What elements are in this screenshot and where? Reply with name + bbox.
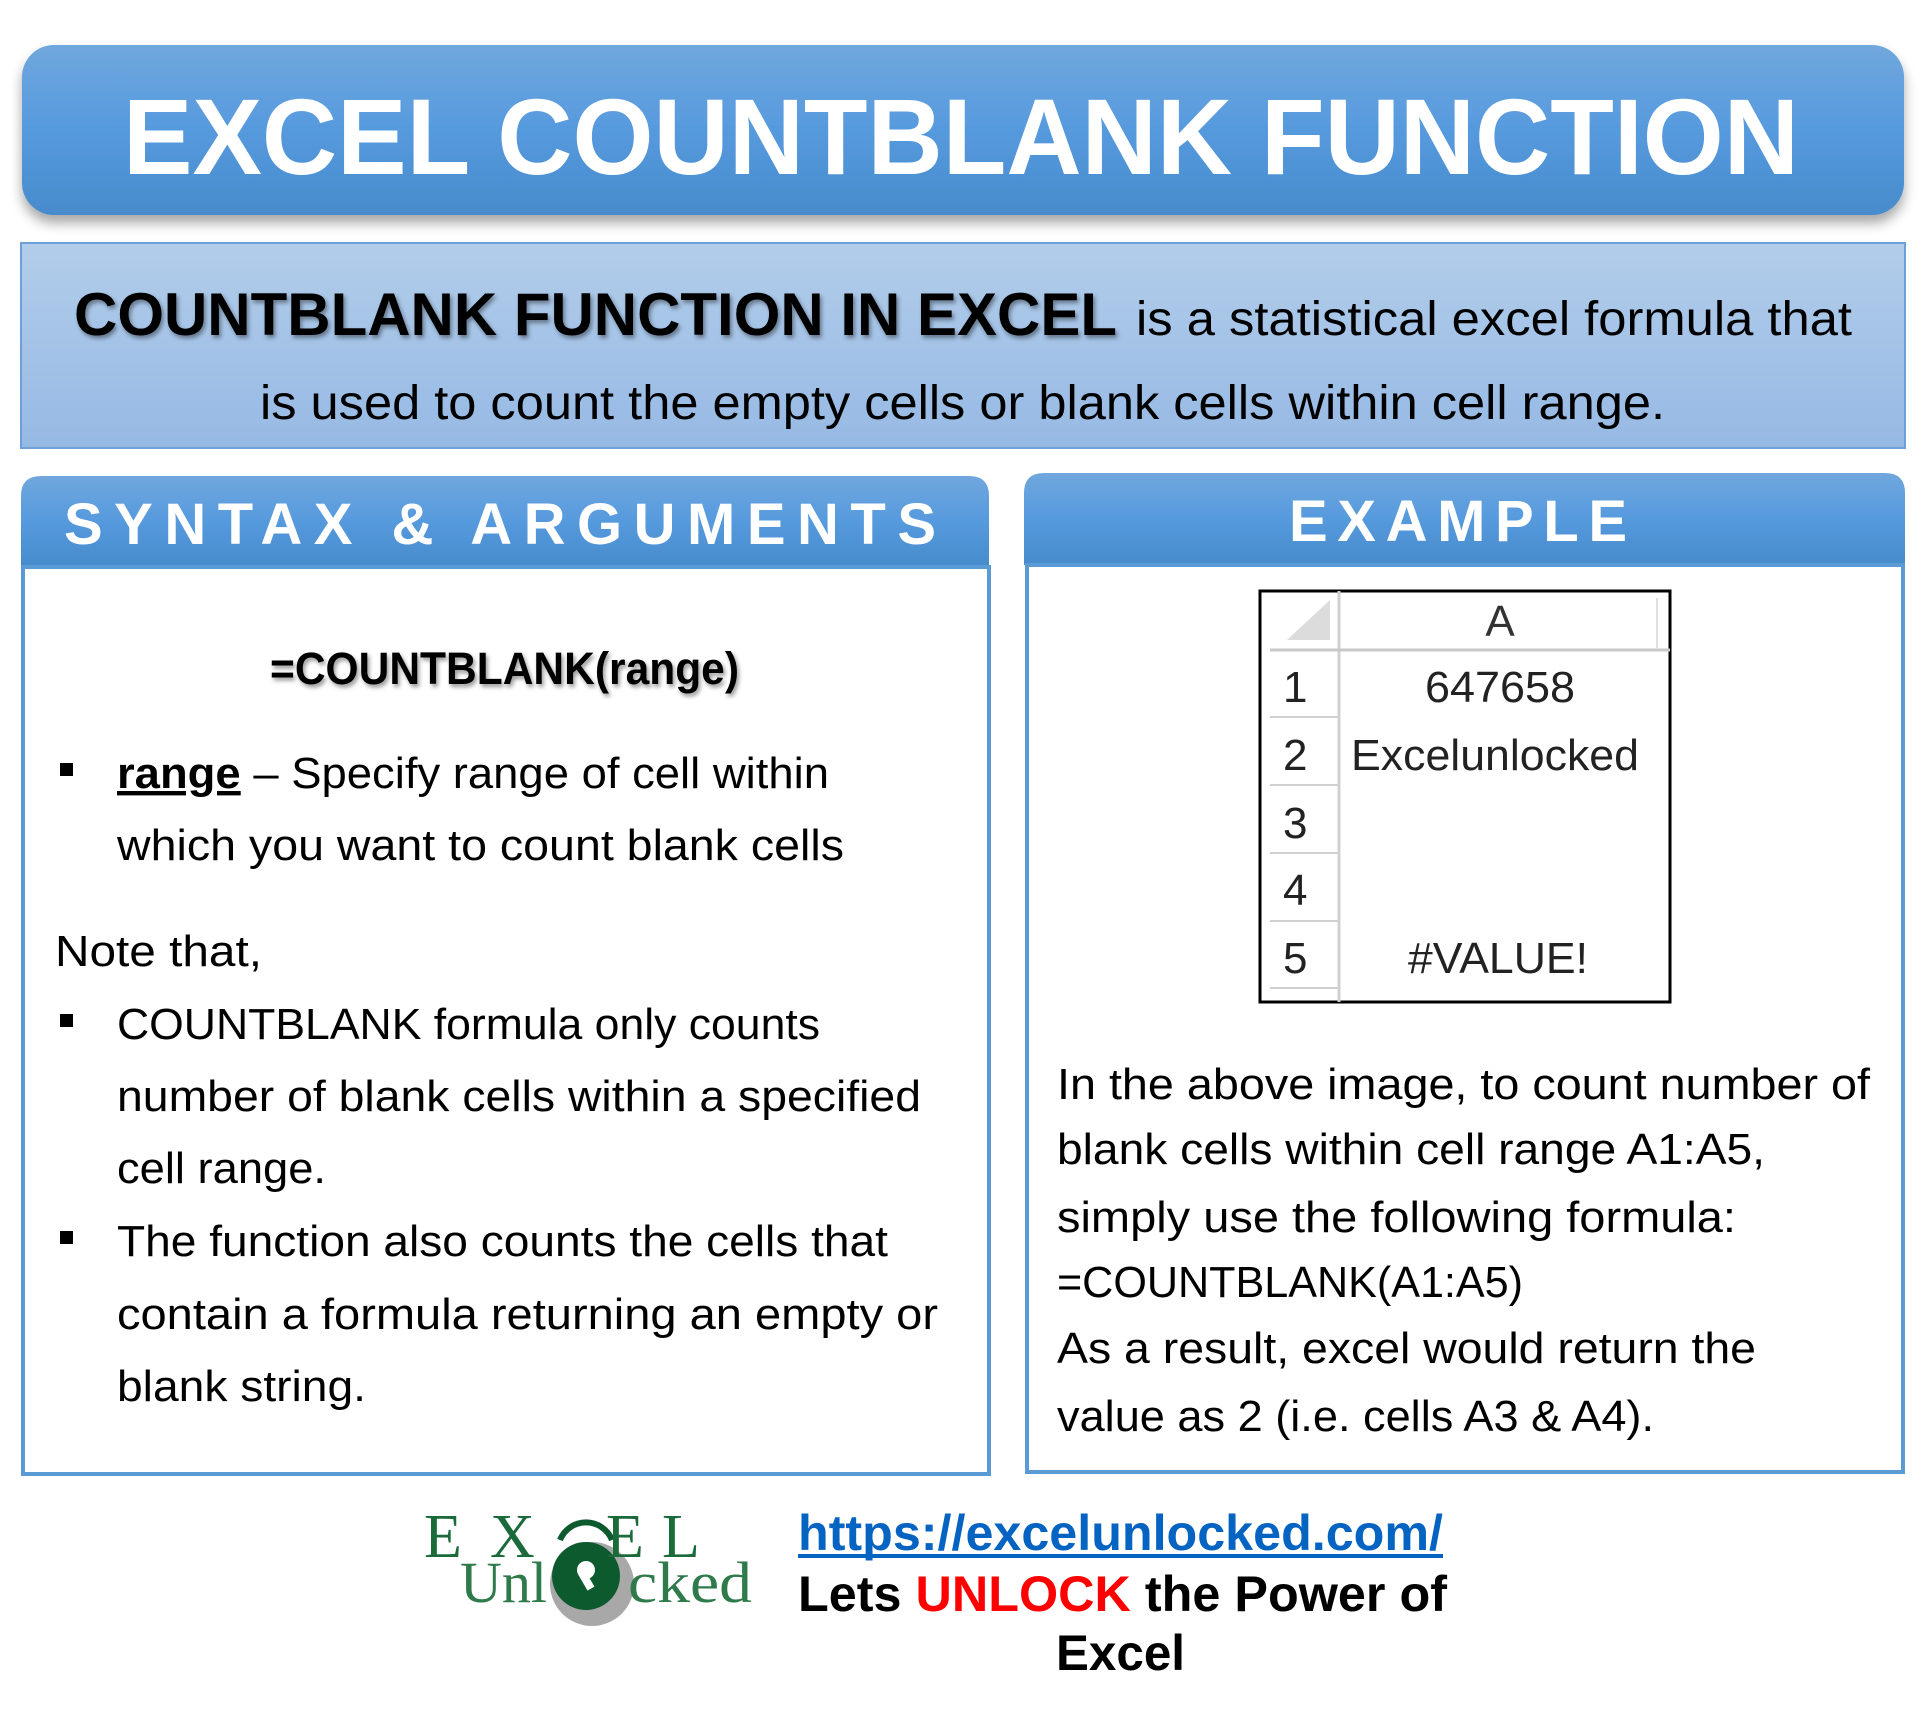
- logo: excel unlocked: [424, 1503, 752, 1626]
- logo: excel unlocked: Unl: [460, 1550, 547, 1615]
- logo: excel unlocked: X: [490, 1503, 535, 1571]
- header: example: EXAMPLE: [1289, 489, 1627, 554]
- header: example: [1024, 473, 1905, 565]
- argument bullet: [60, 749, 844, 870]
- description box: is a statistical excel formula that: [1136, 293, 1852, 346]
- excel table: 1: [1283, 663, 1307, 712]
- footer link and tagline: https://excelunlocked.com/: [798, 1505, 1443, 1561]
- argument bullet: which you want to count blank cells: [116, 821, 844, 870]
- logo: excel unlocked: E: [606, 1503, 644, 1571]
- excel table: A: [1485, 597, 1515, 646]
- note text: The function also counts the cells that: [117, 1217, 888, 1266]
- footer link and tagline: Excel: [1056, 1625, 1185, 1681]
- logo: excel unlocked: cked: [628, 1550, 752, 1615]
- description box: [21, 243, 1905, 448]
- logo: excel unlocked: L: [662, 1503, 700, 1571]
- excel table: [1260, 591, 1670, 1002]
- excel table: 2: [1283, 731, 1307, 780]
- title bar: [22, 45, 1904, 215]
- example explanation: value as 2 (i.e. cells A3 & A4).: [1057, 1392, 1654, 1441]
- note text: cell range.: [117, 1144, 326, 1193]
- logo: excel unlocked: E: [424, 1503, 462, 1571]
- excel table: #VALUE!: [1408, 934, 1588, 983]
- note text: number of blank cells within a specified: [117, 1072, 921, 1121]
- footer link and tagline: Lets UNLOCK the Power of: [798, 1566, 1447, 1622]
- description text: COUNTBLANK FUNCTION IN EXCEL: [74, 281, 1117, 348]
- argument bullet: range – Specify range of cell within: [117, 749, 829, 798]
- note text: blank string.: [117, 1362, 366, 1411]
- note text: [55, 927, 938, 1411]
- title: EXCEL COUNTBLANK FUNCTION: [123, 76, 1799, 197]
- note text: Note that,: [55, 927, 262, 976]
- excel table: 647658: [1425, 663, 1575, 712]
- excel table: Excelunlocked: [1351, 731, 1639, 780]
- excel table: 5: [1283, 934, 1307, 983]
- panel: example: [1024, 473, 1905, 1472]
- example explanation: As a result, excel would return the: [1057, 1324, 1756, 1373]
- excel table: 3: [1283, 799, 1307, 848]
- panel: syntax & arguments: [21, 476, 989, 1474]
- footer link and tagline: [798, 1505, 1447, 1681]
- header: syntax & arguments: SYNTAX & ARGUMENTS: [64, 492, 936, 557]
- header: syntax & arguments: [21, 476, 989, 567]
- example explanation: blank cells within cell range A1:A5,: [1057, 1125, 1765, 1174]
- syntax formula: =COUNTBLANK(range): [270, 643, 739, 694]
- note text: contain a formula returning an empty or: [117, 1290, 938, 1339]
- example explanation: In the above image, to count number of: [1057, 1060, 1871, 1109]
- example explanation: [1057, 1060, 1871, 1441]
- example explanation: =COUNTBLANK(A1:A5): [1057, 1258, 1523, 1307]
- note text: COUNTBLANK formula only counts: [117, 1000, 820, 1049]
- example explanation: simply use the following formula:: [1057, 1193, 1736, 1242]
- description box: is used to count the empty cells or blank cells within cell range.: [260, 377, 1665, 430]
- excel table: 4: [1283, 866, 1307, 915]
